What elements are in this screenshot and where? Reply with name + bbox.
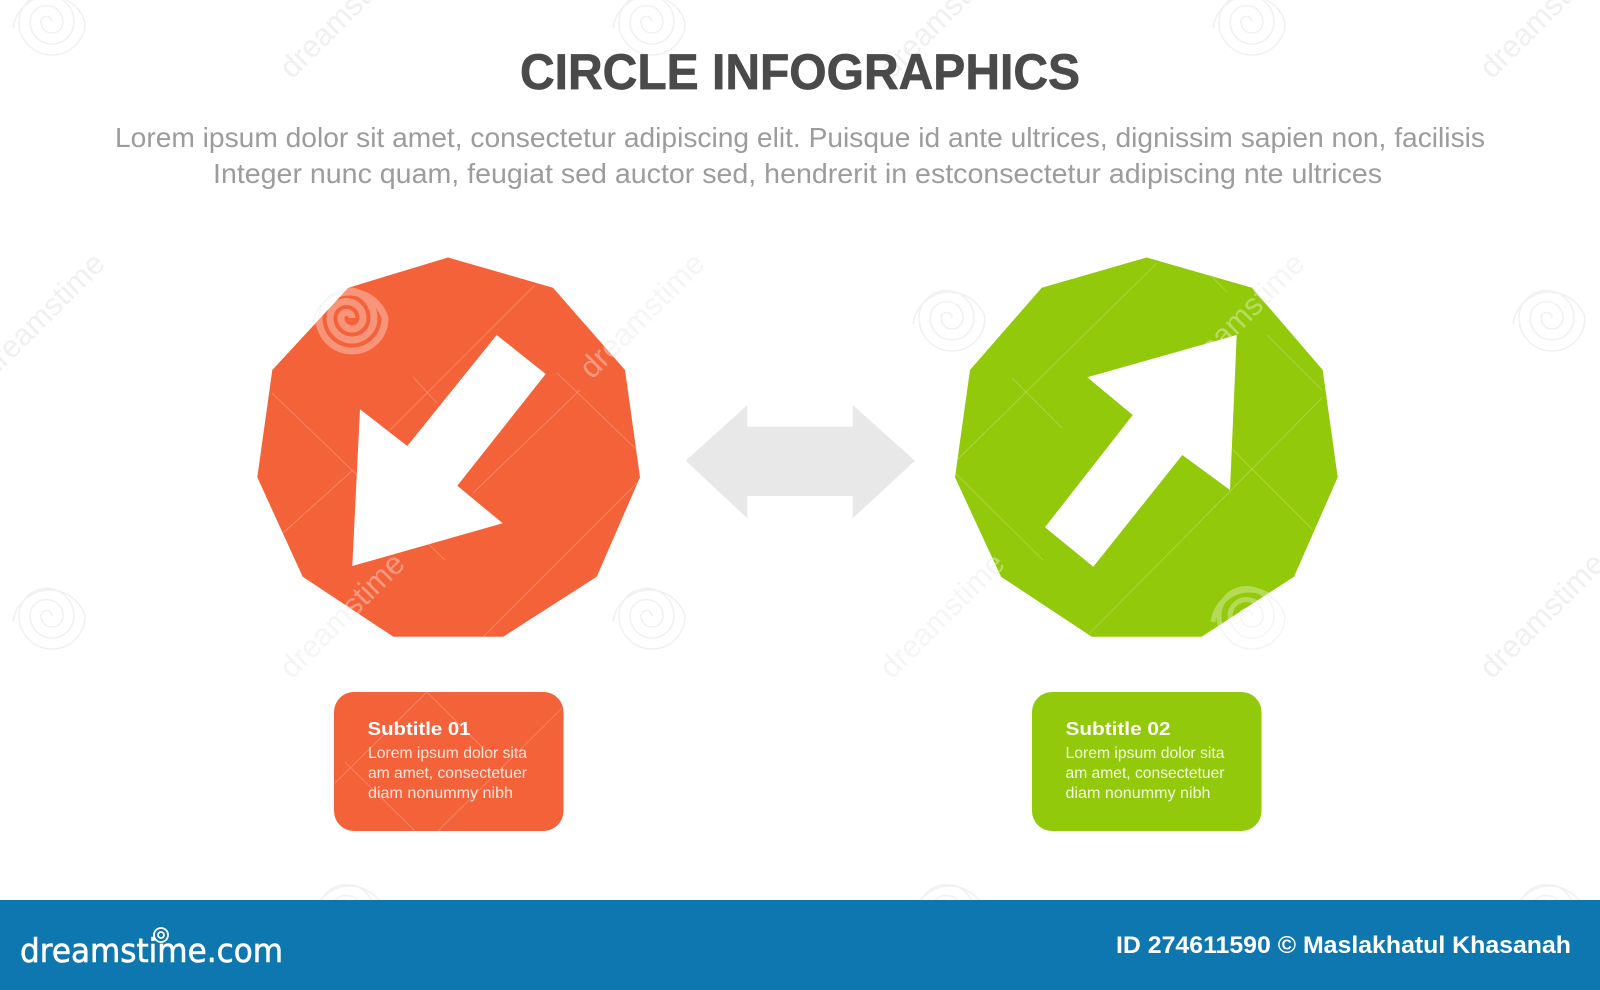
text block: subtitle 01 body (368, 745, 528, 802)
title: CIRCLE INFOGRAPHICS (520, 44, 1080, 100)
icon: white down-left arrow (352, 335, 546, 566)
icon: grey double-headed arrow (686, 405, 915, 518)
watermark: overlays on shapes (272, 246, 1311, 685)
watermark: overlays on shapes: dreamstime (272, 546, 411, 685)
watermark: background spirals and diagonal text: dreamstime (272, 546, 411, 685)
panel: subtitle 02 card (1032, 692, 1262, 831)
subtitle text block: Lorem ipsum dolor sit amet, consectetur adipiscing elit. Puisque id ante ultrices, dignissim sapien non, facilisis (115, 122, 1485, 153)
text block: subtitle 02 body: am amet, consectetuer (1066, 765, 1225, 782)
watermark: overlays on shapes: dreamstime (872, 546, 1011, 685)
footer bar (0, 900, 1600, 990)
panel: right green shape with up arrow (955, 258, 1338, 637)
text block: subtitle 01 body: am amet, consectetuer (368, 765, 528, 782)
watermark: overlays on shapes: dreamstime (572, 246, 711, 385)
watermark: background spirals and diagonal text: dreamstime (1172, 246, 1311, 385)
icon: white up-right arrow (1045, 335, 1237, 567)
watermark: background spirals and diagonal text: dreamstime (872, 546, 1011, 685)
subtitle text block (115, 122, 1485, 189)
watermark: overlays on shapes: dreamstime (1172, 246, 1311, 385)
text block: subtitle 02 body: diam nonummy nibh (1066, 785, 1210, 802)
footer credit: ID 274611590 © Maslakhatul Khasanah (1116, 932, 1571, 959)
panel: left orange shape with down arrow (257, 258, 640, 637)
heading: subtitle 01: Subtitle 01 (368, 719, 470, 739)
panel: subtitle 01 card (334, 692, 564, 831)
footer logo: dreamstime.com (20, 931, 283, 970)
text block: subtitle 02 body (1066, 745, 1225, 802)
watermark: background spirals and diagonal text: dreamstime (572, 246, 711, 385)
icon: logo spiral (154, 928, 168, 942)
text block: subtitle 01 body: Lorem ipsum dolor sita (368, 745, 527, 762)
text block: subtitle 02 body: Lorem ipsum dolor sita (1066, 745, 1225, 762)
subtitle text block: Integer nunc quam, feugiat sed auctor sed, hendrerit in estconsectetur adipiscing nte ultrices (213, 158, 1382, 189)
text block: subtitle 01 body: diam nonummy nibh (368, 785, 513, 802)
heading: subtitle 02: Subtitle 02 (1066, 719, 1170, 739)
